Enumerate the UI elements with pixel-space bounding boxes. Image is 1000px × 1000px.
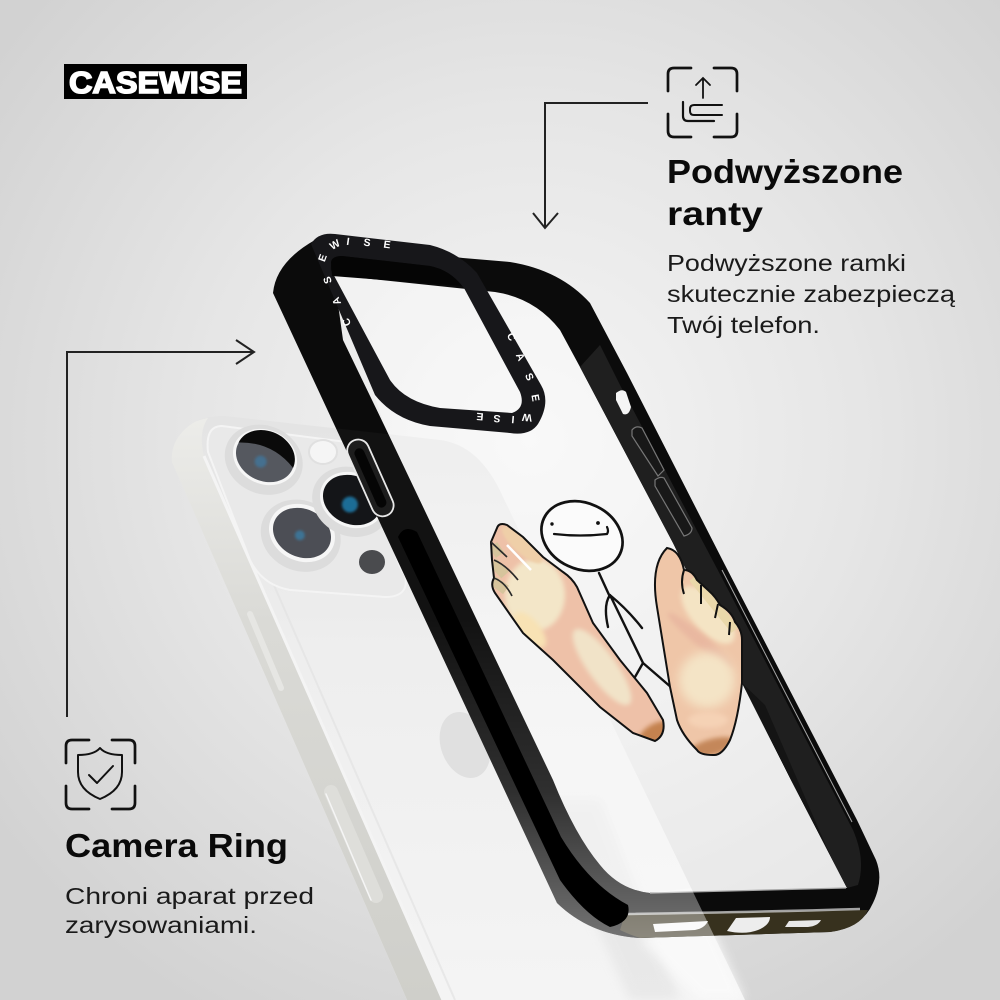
ring lettering: I [511,413,515,425]
stick figure head [530,488,634,584]
right side dark inner panel [580,345,861,888]
ring lettering: W [521,411,532,423]
ring lettering: S [321,275,335,285]
arrow: to raised edges [533,103,648,228]
ring lettering: I [346,236,350,248]
ring lettering: E [316,253,330,263]
lens 1 [213,412,314,507]
left foot [490,523,665,742]
highlight bottom inner edge [650,888,846,893]
text: raised edges description: Podwyższone ramki [667,250,906,276]
text: camera ring description: zarysowaniami. [65,912,257,938]
case: black frame [273,240,879,938]
bottom openings [653,921,708,932]
inner slot on the left rail [398,529,629,927]
ring lettering: C [340,316,354,328]
action button cutout [344,436,397,520]
text: camera ring description [65,883,314,938]
text: raised edges description: Twój telefon. [667,312,820,338]
camera ring [311,234,545,434]
lens 3 [301,454,402,550]
ring lettering: A [513,351,527,363]
apple logo [431,705,499,785]
lens 2 [249,487,353,585]
ring lettering: S [363,237,371,249]
heading: Camera Ring: Camera Ring [65,827,288,864]
ring lettering [316,236,542,425]
heading: Podwyższone ranty [667,153,903,232]
text: camera ring description: Chroni aparat przed [65,883,314,909]
side button lower [331,792,376,896]
bottom lip [620,910,868,938]
lower phone sheen [540,800,680,1000]
heading: Podwyższone ranty: Podwyższone [667,153,903,190]
ring lettering: S [493,412,501,424]
mute notch [616,390,631,414]
text: raised edges description [667,250,956,338]
ring lettering: C [504,331,518,343]
heading: Podwyższone ranty: ranty [667,195,764,232]
ring lettering: E [528,394,542,402]
ring lettering: S [522,371,536,383]
ring lettering: E [383,239,391,251]
lidar [359,550,385,574]
text: raised edges description: skutecznie zabezpieczą [667,281,956,307]
phone side band [172,418,443,1000]
icon: raised edges [668,68,737,137]
icon: shield check [66,740,135,809]
face [554,527,608,536]
ring lettering: E [476,410,484,422]
arrow: to camera ring [67,340,254,717]
side button upper [250,614,281,688]
illustration: stick figure with two feet [490,500,743,756]
right foot [654,546,743,756]
logo: CASEWISE: CASEWISE [69,65,242,100]
side volume buttons [632,427,692,536]
translucent veil where the case sits over the phone [429,627,714,938]
camera plateau [208,426,406,597]
ring band behind lens opening [331,256,462,286]
ring lettering: W [328,237,342,253]
phone: white iPhone back [172,412,745,1000]
stick figure body [599,573,672,688]
ring lettering: A [330,295,344,307]
flash [309,440,337,464]
case: interior transparent tint [334,275,847,893]
